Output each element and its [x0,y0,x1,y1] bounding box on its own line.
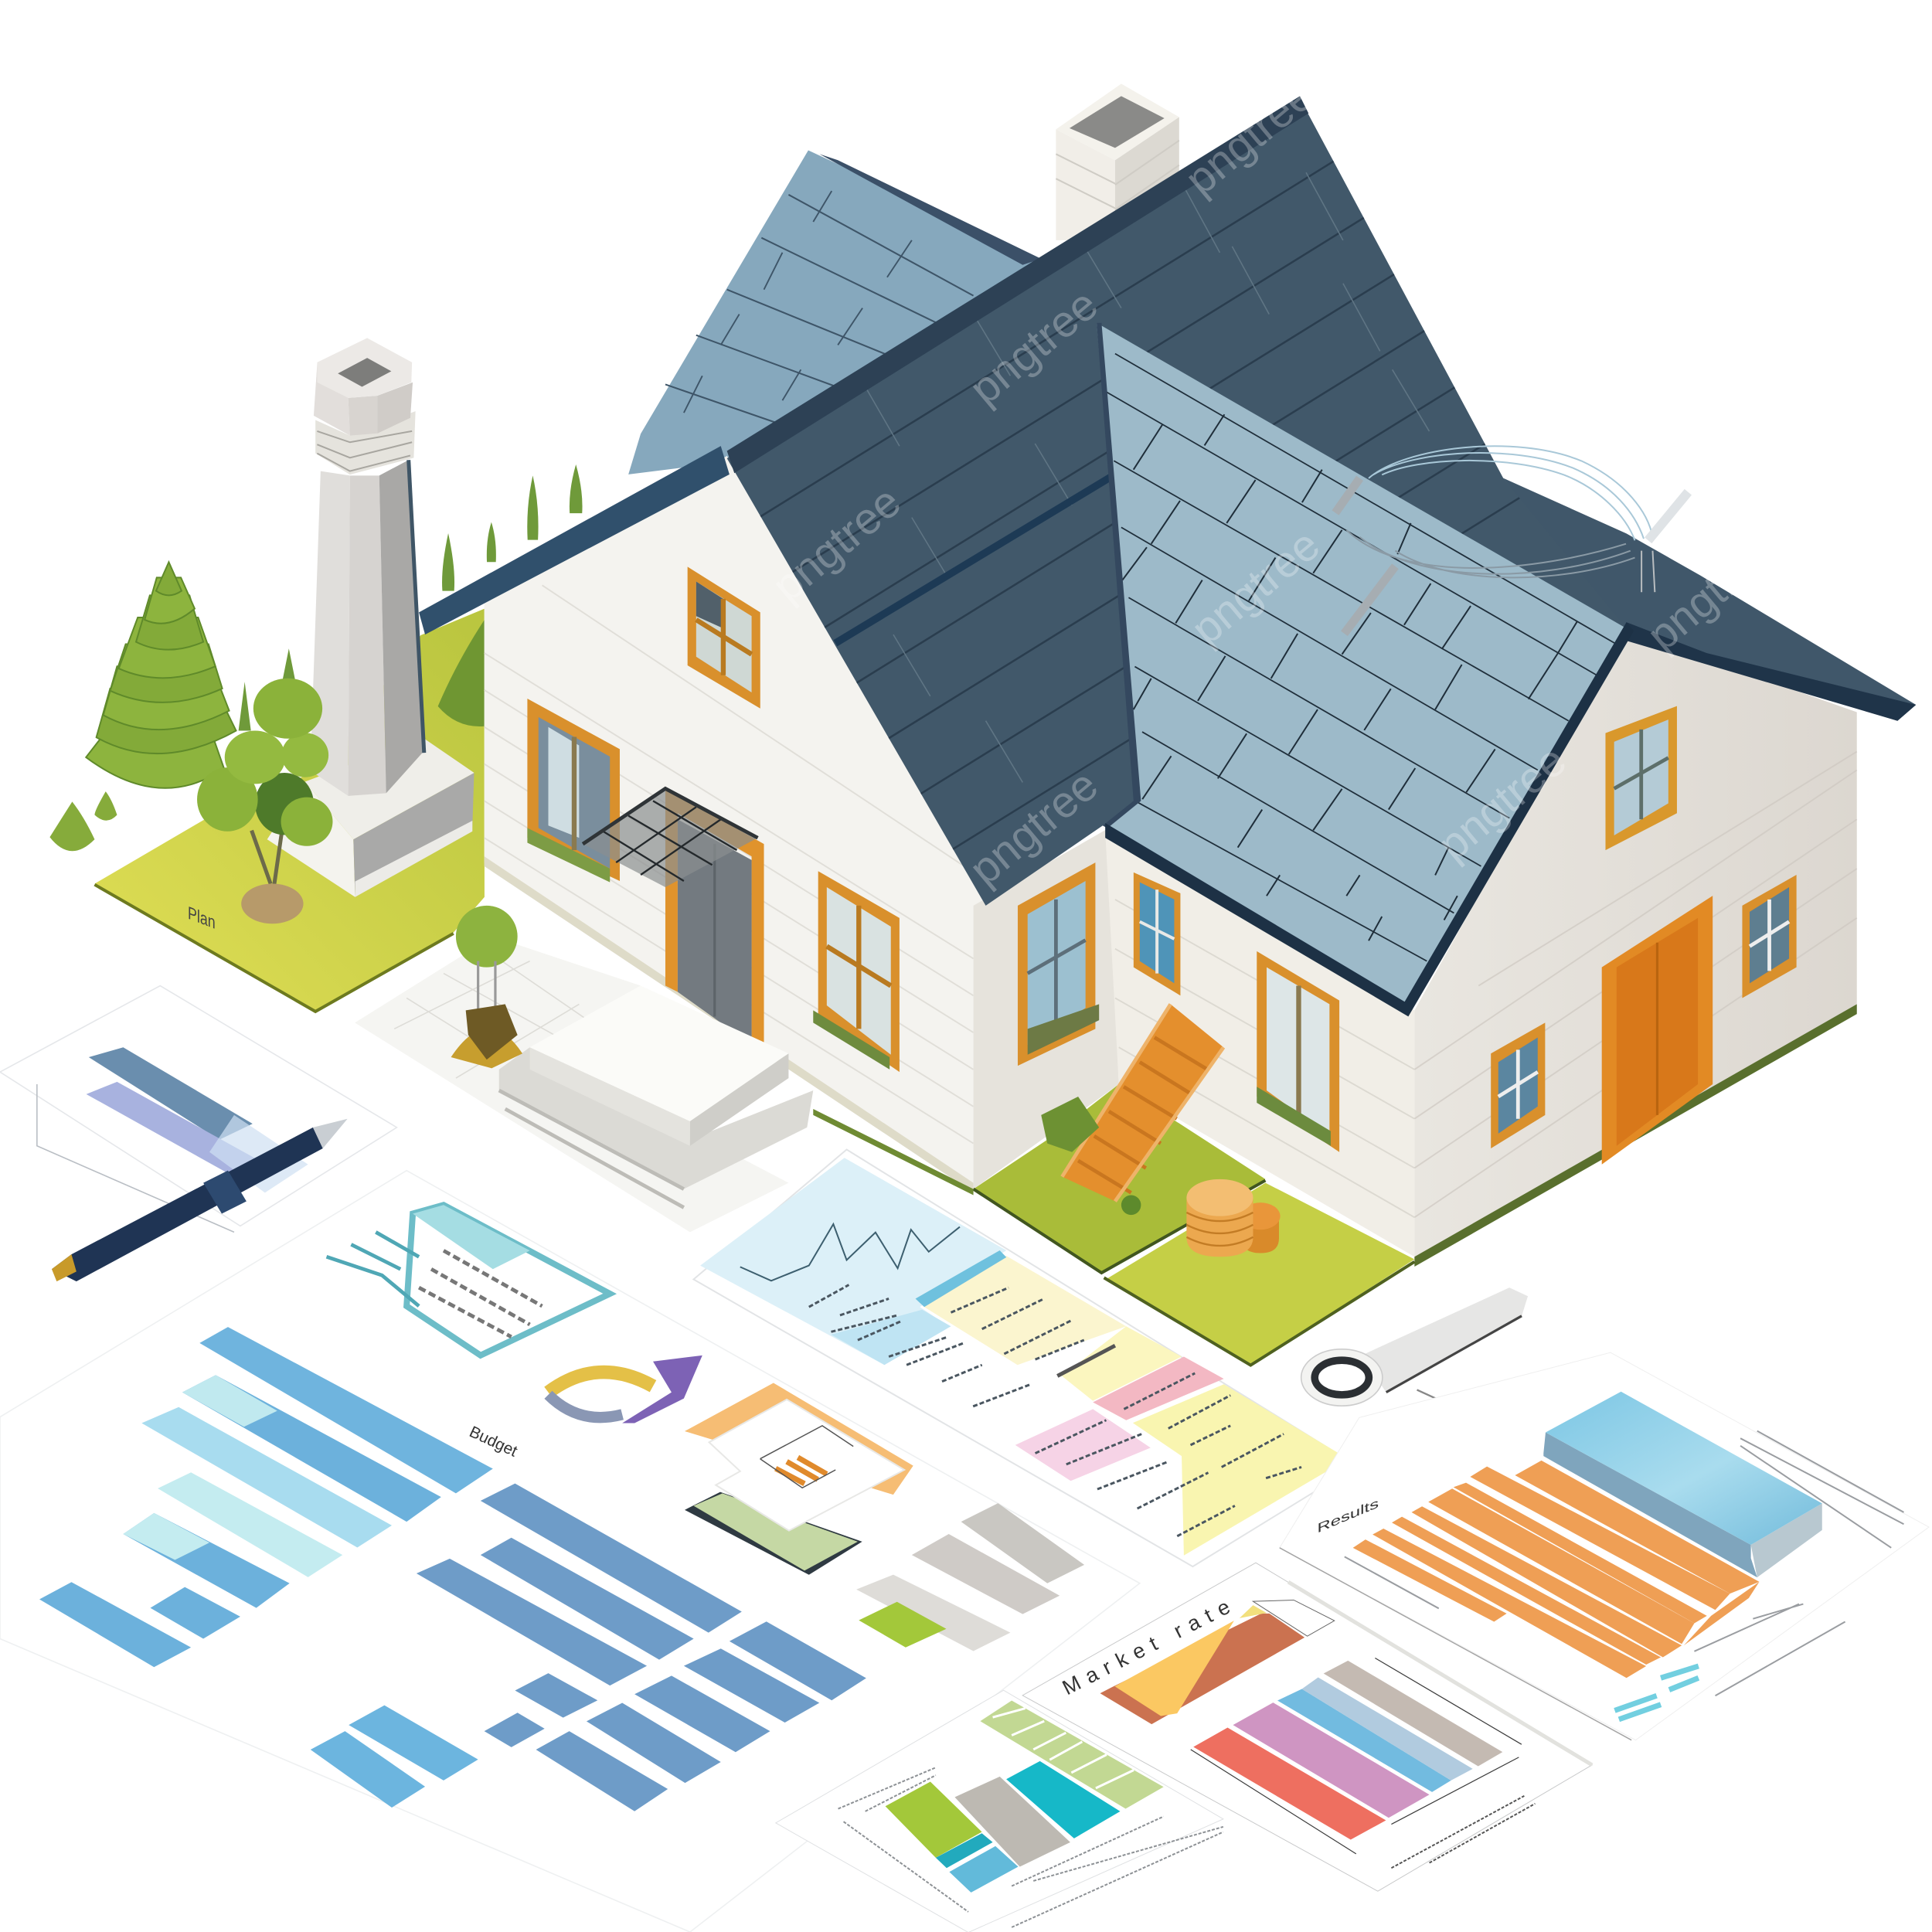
paved path [355,937,788,1232]
window: right lower [1491,1022,1545,1148]
topiary tree [197,648,332,923]
left lawn [94,609,485,1012]
table cells [831,1250,1348,1556]
table scribbles [809,1285,1301,1536]
coin stacks [1186,1179,1281,1257]
gray bar cluster [856,1503,1084,1651]
blue header block [700,1158,1006,1365]
area chart [1100,1614,1304,1724]
pngtree watermarks: pngtree [764,477,910,611]
main bar chart sheet [0,1171,1140,1932]
lower chart documents [776,1563,1592,1932]
left yard group [49,338,583,1012]
rear chimney [1056,83,1179,240]
blue book [1543,1392,1822,1577]
document with orange bars and book: Results [1318,1495,1379,1536]
colored table document [685,1150,1357,1575]
right wall [1414,631,1857,1267]
distant cypress trees [442,464,583,591]
column capital [314,338,416,474]
window: right upper [1605,706,1677,850]
left wall [485,456,986,1192]
small fir shrubs [49,791,117,851]
big fir tree [86,562,236,788]
stone column base [267,737,474,897]
orange staircase [1062,1004,1223,1202]
orange side door [1602,896,1713,1165]
window: small center [1134,872,1180,995]
pngtree watermarks: pngtree [1176,70,1323,205]
entry steps [499,986,813,1207]
teal blueprint diagram [327,1205,610,1355]
orange framed card [685,1383,913,1575]
dark blue bars [417,1484,866,1811]
pngtree watermarks: pngtree [961,760,1107,895]
wire coil on roof [1335,446,1688,634]
window: lower left [527,699,620,883]
colored bars [1193,1728,1386,1840]
orange bars [1353,1461,1759,1678]
pngtree watermarks: pngtree [1182,520,1329,655]
front wall [974,828,1414,1257]
back gable roof [628,151,1041,474]
front door [665,788,764,1053]
pngtree watermarks: pngtree [1429,736,1576,870]
main dark roof [726,96,1618,906]
front lawn [813,1084,1414,1366]
upper right sheet [1022,1563,1592,1891]
circular arrow graphic [549,1355,702,1423]
pen [52,1119,348,1281]
document with orange bars and book [1280,1352,1929,1740]
window: porch side [813,871,900,1072]
mesh awning [583,788,758,887]
chart sheet with pen [0,986,396,1232]
right lower dark roof [1466,431,1916,721]
pngtree watermarks: pngtree [961,280,1107,414]
wrench [1301,1287,1528,1417]
window: front left [1018,862,1099,1066]
heading scribble: Budget [467,1423,520,1461]
lower left sheet [776,1690,1223,1932]
side text lines [1345,1431,1903,1696]
stone column shaft [310,460,424,796]
shrub [1041,1097,1141,1215]
left lawn: Plan [188,903,216,934]
window: front right [1257,951,1339,1152]
left eave [419,446,730,634]
potted topiary [451,906,522,1068]
roof tile joints [1122,414,1577,940]
pen clip on table [1057,1345,1115,1376]
bottom blue bars [311,1706,478,1808]
window: right far [1742,875,1797,998]
pngtree watermarks [764,70,1785,895]
fir behind house [438,620,485,726]
pngtree watermarks: pngtree [1638,526,1785,661]
hand-drawn chart line [740,1224,960,1281]
area chart heading: Market rate [1058,1594,1234,1699]
window: upper left [688,566,760,709]
front light gable roof [1097,323,1634,1016]
light blue bars [39,1327,493,1667]
